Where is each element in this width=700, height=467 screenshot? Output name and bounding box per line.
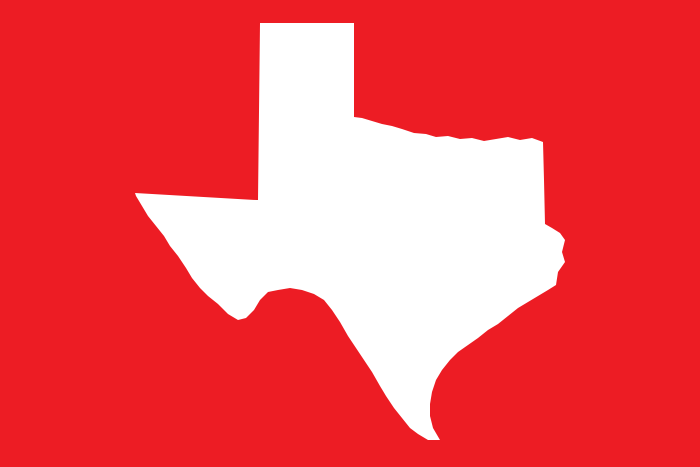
shape: Texas state outline — [135, 23, 565, 440]
